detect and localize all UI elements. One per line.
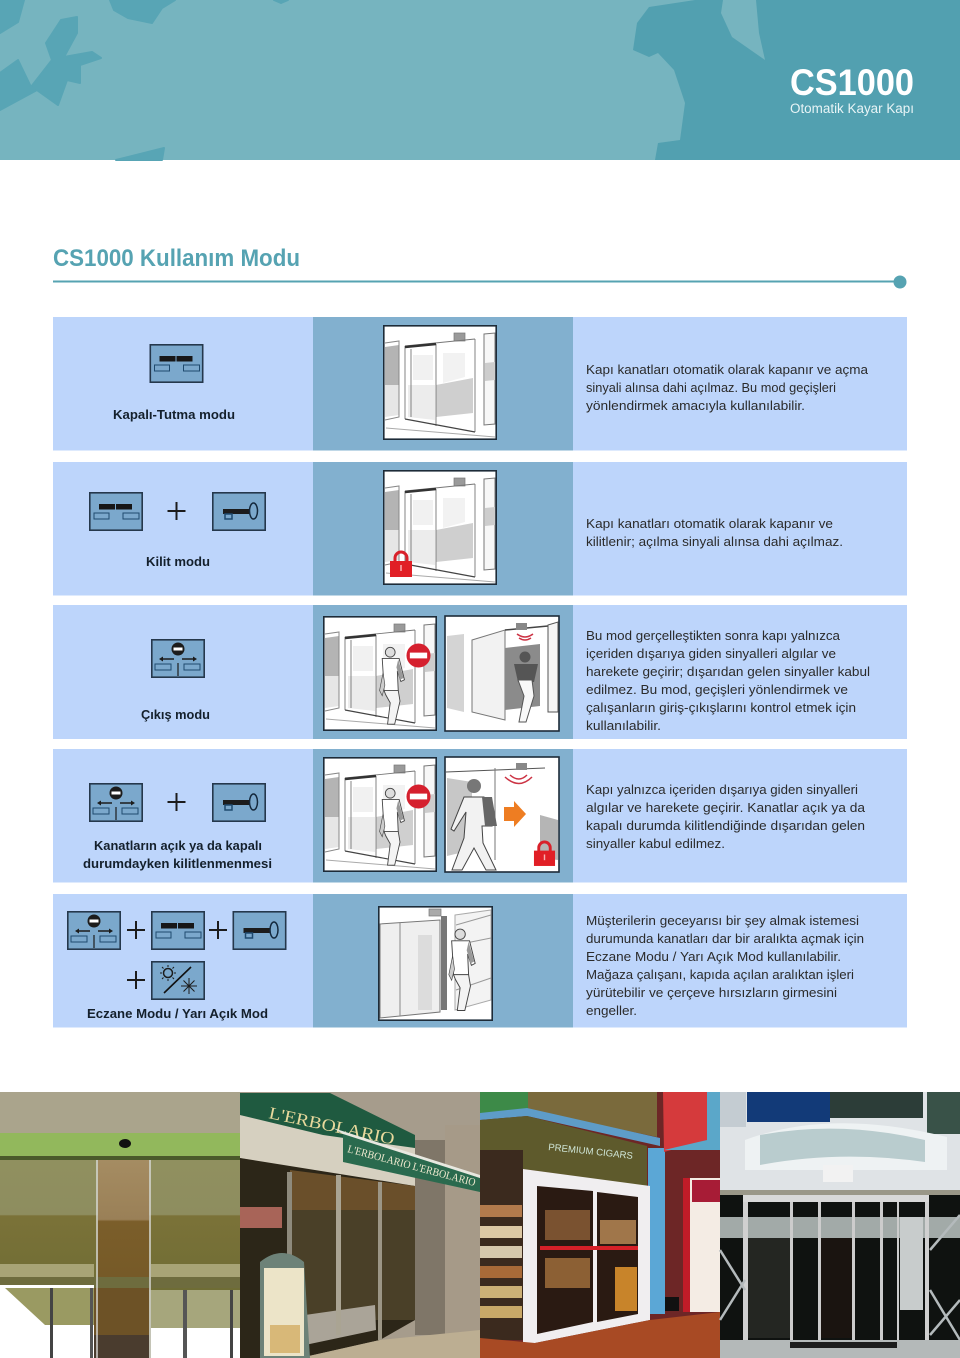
label: two-line mode name [83, 838, 272, 871]
photo: Premium Cigars shop [480, 1092, 720, 1358]
description: kullanılabilir. [586, 718, 661, 733]
icon: plus [127, 921, 145, 939]
icon: exit [90, 784, 142, 821]
sign: L'Erbolario fascia: L'ERBOLARIO [267, 1103, 396, 1149]
photo: L'Erbolario shop front [240, 1092, 480, 1358]
header banner [0, 0, 960, 160]
illustration: locked door [384, 471, 496, 584]
description: yürütebilir ve çerçeve hırsızların girmesini [586, 985, 837, 1000]
description: Eczane Modu / Yarı Açık Mod kullanılabilir. [586, 949, 841, 964]
description: sinyali alınsa dahi açılmaz. Bu mod geçişleri [586, 380, 836, 395]
panel: Kanatların açık ya da kapalı durumdayken kilitlenmenmesi [53, 749, 907, 882]
illustration: half-open door with employee [379, 907, 492, 1020]
description: harekete geçirir; dışarıdan gelen sinyaller kabul [586, 664, 870, 679]
icon: key [213, 784, 265, 821]
icon: closed doors [152, 912, 204, 949]
description: yönlendirmek amacıyla kullanılabilir. [586, 398, 805, 413]
subtitle: Otomatik Kayar Kapı [790, 101, 914, 116]
icon: red lock [390, 552, 412, 577]
description: Mağaza çalışanı, kapıda açılan aralıktan işleri [586, 967, 854, 982]
decorative shape: right dark area [633, 0, 960, 160]
description: kapalı durumda kilitlendiğinde dışarıdan gelen [586, 818, 865, 833]
description: içeriden dışarıya giden sinyalleri algılar ve [586, 646, 836, 661]
icon: exit [152, 640, 204, 677]
icon: closed doors [90, 493, 142, 530]
icon: key [213, 493, 265, 530]
description: edilmez. Bu mod, geçişleri yönlendirmek ve [586, 682, 848, 697]
label: Çıkış modu: Çıkış modu [141, 707, 210, 722]
description: Kapı kanatları otomatik olarak kapanır ve açma [586, 362, 869, 377]
description: Kapı kanatları otomatik olarak kapanır ve [586, 516, 833, 531]
icon: key [233, 912, 286, 949]
photo: modern entrance with glass canopy [720, 1092, 960, 1358]
title: CS1000 [790, 62, 914, 103]
icon: plus [168, 793, 186, 811]
illustration: person blocked [324, 617, 436, 730]
description [586, 516, 843, 549]
description [586, 362, 869, 413]
panel: Kapalı-Tutma modu [53, 317, 907, 450]
panel: Eczane Modu / Yarı Açık Mod [53, 894, 907, 1028]
icon: closed doors [150, 345, 203, 382]
banner: L'Erbolario awning [333, 1128, 480, 1192]
photo: Premium Cigars shop: PREMIUM CIGARS [548, 1142, 633, 1162]
description: Bu mod gerçelleştikten sonra kapı yalnızca [586, 628, 841, 643]
description: çalışanların giriş-çıkışlarını kontrol etmek için [586, 700, 856, 715]
description: sinyaller kabul edilmez. [586, 836, 725, 851]
description [586, 628, 870, 733]
description: engeller. [586, 1003, 637, 1018]
icon: summer / winter [152, 962, 204, 999]
illustration: person leaving with lock [445, 757, 559, 872]
label: two-line mode name: durumdayken kilitlenmenmesi [83, 856, 272, 871]
label: Kapalı-Tutma modu: Kapalı-Tutma modu [113, 407, 235, 422]
description [586, 782, 866, 851]
icon: plus [168, 502, 186, 520]
sign board [260, 1253, 310, 1358]
banner: L'Erbolario awning: L'ERBOLARIO L'ERBOLARIO [346, 1143, 477, 1189]
illustration: person blocked [324, 758, 436, 871]
icon: exit [68, 912, 120, 949]
description: kilitlenir; açılma sinyali alınsa dahi açılmaz. [586, 534, 843, 549]
description: algılar ve harekete geçirir. Kanatlar açık ya da [586, 800, 866, 815]
label: Kilit modu: Kilit modu [146, 554, 210, 569]
photo: glass door with green header [0, 1092, 240, 1358]
illustration: person exiting [445, 616, 559, 731]
description: Müşterilerin geceyarısı bir şey almak istemesi [586, 913, 859, 928]
description [586, 913, 864, 1018]
description: Kapı yalnızca içeriden dışarıya giden sinyalleri [586, 782, 858, 797]
illustration: closed door [384, 326, 496, 439]
label: two-line mode name: Kanatların açık ya da kapalı [94, 838, 262, 853]
sign: L'Erbolario fascia [240, 1093, 415, 1149]
description: durumunda kanatları dar bir aralıkta açmak için [586, 931, 864, 946]
label: Eczane Modu: Eczane Modu / Yarı Açık Mod [87, 1006, 268, 1021]
icon: plus [209, 921, 227, 939]
icon: plus [127, 971, 145, 989]
panel: Çıkış modu [53, 605, 907, 739]
heading rule with dot [53, 276, 906, 288]
panel: Kilit modu [53, 462, 907, 596]
section heading: CS1000 Kullanım Modu [53, 245, 300, 272]
